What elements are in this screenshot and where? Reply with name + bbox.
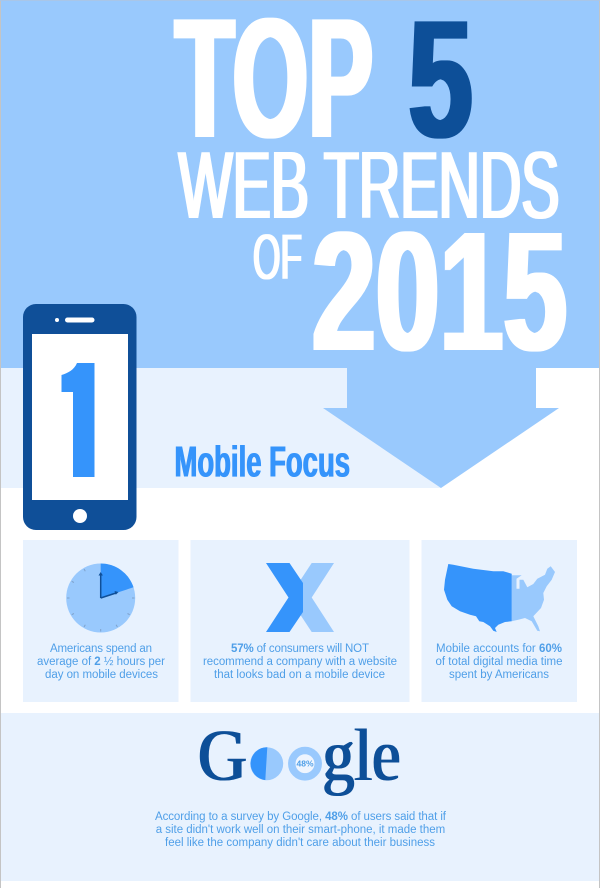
heading: Mobile Focus: Mobile Focus	[174, 438, 350, 486]
text: 60 percent	[436, 643, 562, 681]
arrow pointing down	[323, 367, 559, 488]
title: OF: OF	[253, 221, 302, 293]
icon: US map	[444, 564, 555, 632]
text: 57 percent: that looks bad on a mobile device	[214, 669, 385, 681]
text: survey result: feel like the company didn't care about their business	[165, 837, 435, 849]
text: hours per day	[37, 643, 165, 681]
text: hours per day: Americans spend an	[50, 643, 152, 655]
text: survey result: According to a survey by Google, 48% of users said that if	[155, 811, 447, 823]
text: 60 percent: Mobile accounts for 60%	[436, 643, 562, 655]
Google wordmark with charts: G	[198, 715, 247, 796]
panel: Google survey	[0, 713, 600, 881]
icon: clock	[66, 564, 135, 632]
text: hours per day: day on mobile devices	[45, 669, 158, 681]
text: 57 percent: recommend a company with a website	[203, 656, 397, 668]
Google wordmark with charts	[198, 715, 400, 797]
panel: consumers	[190, 540, 410, 702]
icon: smartphone with number 1	[23, 304, 136, 530]
text: 60 percent: of total digital media time	[436, 656, 562, 668]
text: 57 percent: 57% of consumers will NOT	[231, 643, 369, 655]
title	[175, 0, 567, 387]
panel: time on mobile	[23, 540, 178, 702]
ring: 48 percent: 48%	[296, 759, 314, 769]
icon: X mark	[266, 563, 334, 632]
text: survey result: a site didn't work well on their smart-phone, it made them	[156, 824, 445, 836]
pie: half circle	[250, 747, 283, 780]
text: 60 percent: spent by Americans	[449, 669, 549, 681]
ring: 48 percent	[292, 750, 318, 777]
text: survey result	[155, 811, 447, 849]
Google wordmark with charts: gle	[322, 715, 400, 797]
text: 57 percent	[203, 643, 397, 681]
text: hours per day: average of 2 ½ hours per	[37, 656, 165, 668]
panel: digital media	[422, 540, 577, 702]
number 1	[62, 363, 94, 477]
